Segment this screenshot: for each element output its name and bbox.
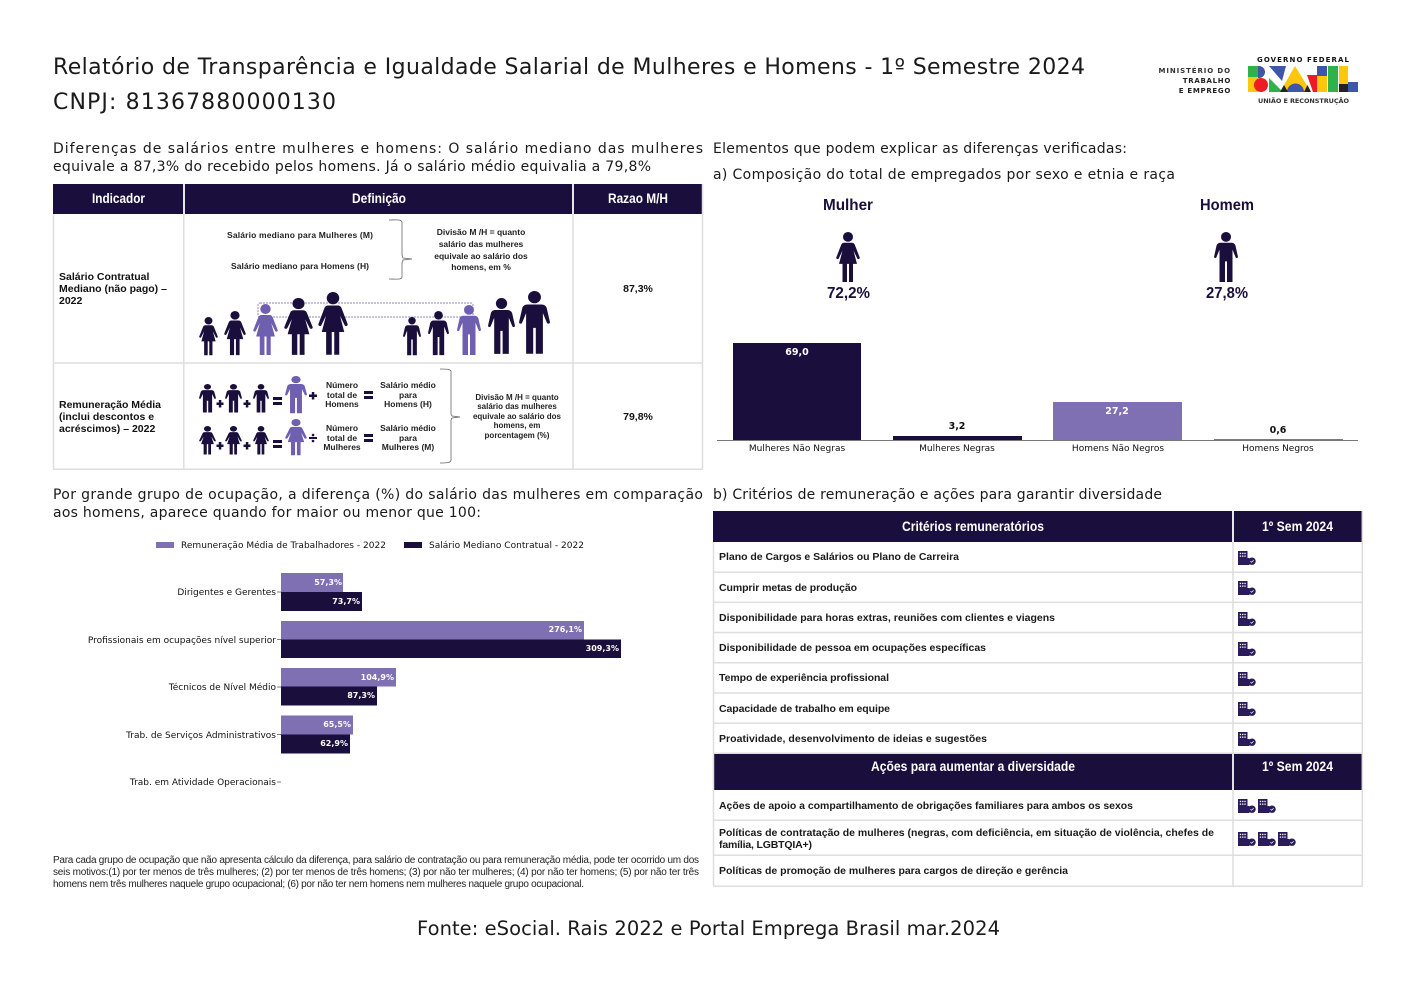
row label: remuneração média: acréscimos) – 2022	[59, 423, 155, 435]
logo: ministério: MINISTÉRIO DO	[1159, 66, 1231, 75]
salário mediano labels: Divisão M /H = quanto	[437, 227, 525, 237]
divisão remuneração: porcentagem (%)	[485, 431, 550, 440]
panel: tabela indicadores	[53, 184, 703, 470]
bar chart: composição: 69,0	[785, 347, 809, 358]
heading: elementos	[713, 141, 1175, 183]
intro text: salários: equivale a 87,3% do recebido pelos homens. Já o salário médio equivalia a 79,8%	[53, 159, 651, 175]
bar chart: ocupação: 57,3%	[314, 578, 342, 587]
footnote	[53, 855, 699, 890]
logo: ministério: TRABALHO	[1183, 77, 1231, 85]
salário mediano labels: Salário mediano para Mulheres (M)	[227, 230, 373, 240]
critérios rows: Plano de Cargos e Salários ou Plano de Carreira	[719, 551, 959, 563]
table header: ações: Ações para aumentar a diversidade	[871, 759, 1075, 774]
bar chart: ocupação: Trab. em Atividade Operacionais	[129, 778, 276, 788]
divisão remuneração: equivale ao salário dos	[473, 412, 562, 421]
bar chart: ocupação: Profissionais em ocupações nível superior	[88, 636, 276, 646]
critérios rows: Cumprir metas de produção	[719, 582, 857, 594]
intro text: salários	[53, 141, 703, 175]
row label: remuneração média: (inclui descontos e	[59, 411, 154, 423]
ações rows	[719, 800, 1214, 877]
panel: homem	[1200, 197, 1254, 302]
salário mediano labels: salário das mulheres	[439, 239, 524, 249]
critérios rows: Disponibilidade para horas extras, reuniões com clientes e viagens	[719, 612, 1055, 624]
critérios rows	[719, 551, 1055, 745]
table header: Indicador	[92, 191, 146, 206]
fórmula: mulheres: para	[399, 433, 417, 443]
table header	[53, 184, 703, 214]
divisão remuneração: Divisão M /H = quanto	[475, 393, 559, 402]
fórmula: mulheres: total de	[327, 433, 357, 443]
salário mediano labels: equivale ao salário dos	[434, 251, 528, 261]
salário mediano labels: homens, em %	[451, 262, 511, 272]
bar chart: ocupação: 87,3%	[347, 691, 375, 700]
logo: ministério	[1159, 66, 1231, 95]
row label: salário contratual	[59, 271, 167, 307]
fórmula: homens: Salário médio	[380, 380, 436, 390]
divisão remuneração	[440, 369, 562, 463]
row label: salário contratual: Mediano (não pago) –	[59, 283, 167, 295]
heading: grande grupo: Por grande grupo de ocupação, a diferença (%) do salário das mulheres em comparação	[53, 487, 703, 503]
bar chart: ocupação: 73,7%	[332, 597, 360, 606]
bar chart: composição: Homens Não Negros	[1072, 444, 1164, 454]
fórmula: mulheres: Número	[326, 423, 358, 433]
fórmula: mulheres: Salário médio	[380, 423, 436, 433]
bar chart: composição: Mulheres Não Negras	[749, 444, 845, 454]
critérios icons	[1238, 551, 1256, 746]
logo: governo federal brasil: UNIÃO E RECONSTRUÇÃO	[1258, 96, 1349, 105]
bar chart: ocupação	[88, 573, 621, 788]
ações rows: Ações de apoio a compartilhamento de obrigações familiares para ambos os sexos	[719, 800, 1133, 812]
row label: salário contratual: 2022	[59, 295, 83, 307]
table header: Razao M/H	[608, 191, 668, 206]
fórmula: homens: Número	[326, 380, 358, 390]
salário mediano labels	[227, 220, 528, 279]
fórmula: mulheres: Mulheres	[323, 442, 361, 452]
fórmula: mulheres	[199, 419, 436, 455]
bar chart: ocupação: 62,9%	[320, 739, 348, 748]
value: 79,8%: 79,8%	[623, 411, 654, 423]
ações icons	[1238, 799, 1296, 846]
row label: salário contratual: Salário Contratual	[59, 271, 150, 283]
icon: homem	[1214, 232, 1238, 282]
critérios rows: Disponibilidade de pessoa em ocupações específicas	[719, 642, 986, 654]
legend	[156, 540, 584, 551]
heading: elementos: a) Composição do total de empregados por sexo e etnia e raça	[713, 167, 1175, 183]
critérios rows: Tempo de experiência profissional	[719, 672, 889, 684]
title: Relatório de Transparência e Igualdade Salarial de Mulheres e Homens - 1º Semestre 2024	[53, 55, 1085, 80]
fórmula: homens: total de	[327, 390, 357, 400]
footnote: homens nem três mulheres naquele grupo ocupacional; (6) por não ter nem homens nem mulheres naquele grupo ocupacional.	[53, 879, 584, 890]
legend: Remuneração Média de Trabalhadores - 2022	[181, 540, 386, 551]
fórmula: mulheres: Mulheres (M)	[382, 442, 434, 452]
footnote: Para cada grupo de ocupação que não apresenta cálculo da diferença, para salário de contratação ou para remuneração média, pode ter ocorrido um dos	[53, 855, 699, 866]
footnote: seis motivos:(1) por ter menos de três mulheres; (2) por ter menos de três homens; (3) por não ter mulheres; (4) por não ter homens; (5) por não ter três	[53, 867, 699, 878]
bar chart: ocupação: Técnicos de Nível Médio	[168, 682, 276, 693]
table header: semestre: 1º Sem 2024	[1262, 519, 1333, 534]
intro text: salários: Diferenças de salários entre mulheres e homens: O salário mediano das mulheres	[53, 141, 703, 157]
row label: remuneração média	[59, 399, 161, 435]
panel: homem: 27,8%	[1206, 285, 1248, 302]
ações rows: Políticas de promoção de mulheres para cargos de direção e gerência	[719, 865, 1068, 877]
logo: governo federal brasil: GOVERNO FEDERAL	[1257, 56, 1350, 64]
panel: homem: Homem	[1200, 197, 1254, 214]
bar chart: ocupação: 309,3%	[586, 644, 619, 653]
logo: governo federal brasil	[1248, 56, 1358, 105]
ações rows: Políticas de contratação de mulheres (negras, com deficiência, em situação de violência, chefes de	[719, 827, 1214, 839]
divisão remuneração: homens, em	[494, 421, 540, 430]
bar chart: composição: Homens Negros	[1242, 444, 1314, 454]
fórmula: homens	[199, 376, 436, 413]
bar chart: ocupação: 276,1%	[549, 625, 582, 634]
panel: tabela critérios	[713, 511, 1363, 886]
salário mediano labels: Salário mediano para Homens (H)	[231, 261, 369, 271]
bar chart: composição: 27,2	[1105, 406, 1129, 417]
heading: grande grupo: aos homens, aparece quando for maior ou menor que 100:	[53, 505, 481, 521]
bar chart: composição: 0,6	[1270, 425, 1287, 436]
bar chart: ocupação: Trab. de Serviços Administrativos	[125, 731, 276, 741]
icon: mulher	[836, 232, 860, 282]
ações rows: família, LGBTQIA+)	[719, 839, 812, 851]
heading: grande grupo	[53, 487, 703, 521]
title: CNPJ: 81367880000130	[53, 90, 336, 115]
bar chart: ocupação: 65,5%	[323, 720, 351, 729]
icons: pessoas mediana	[199, 291, 550, 355]
value: 87,3%: 87,3%	[623, 283, 654, 295]
table header: Definição	[352, 191, 406, 206]
divisão remuneração: salário das mulheres	[477, 402, 557, 411]
source: Fonte: eSocial. Rais 2022 e Portal Emprega Brasil mar.2024	[417, 917, 1000, 940]
bar chart: ocupação: 104,9%	[361, 673, 394, 682]
panel: mulher: Mulher	[823, 197, 873, 214]
critérios rows: Proatividade, desenvolvimento de ideias e sugestões	[719, 733, 987, 745]
bar chart: composição	[717, 343, 1358, 454]
fórmula: homens: Homens	[325, 399, 359, 409]
bar chart: composição: 3,2	[949, 421, 965, 432]
heading: elementos: Elementos que podem explicar as diferenças verificadas:	[713, 141, 1127, 157]
table header: critérios: Critérios remuneratórios	[902, 519, 1044, 534]
row label: remuneração média: Remuneração Média	[59, 399, 161, 411]
legend: Salário Mediano Contratual - 2022	[429, 541, 584, 551]
panel: mulher: 72,2%	[827, 285, 870, 302]
fórmula: homens: Homens (H)	[384, 399, 432, 409]
heading: critérios: b) Critérios de remuneração e ações para garantir diversidade	[713, 487, 1162, 503]
title	[53, 55, 1085, 115]
logo: ministério: E EMPREGO	[1179, 87, 1231, 95]
bar chart: ocupação: Dirigentes e Gerentes	[177, 588, 276, 598]
panel: mulher	[823, 197, 873, 302]
table header: semestre 2: 1º Sem 2024	[1262, 759, 1333, 774]
bar chart: composição: Mulheres Negras	[919, 444, 995, 454]
critérios rows: Capacidade de trabalho em equipe	[719, 703, 890, 715]
fórmula: homens: para	[399, 390, 417, 400]
